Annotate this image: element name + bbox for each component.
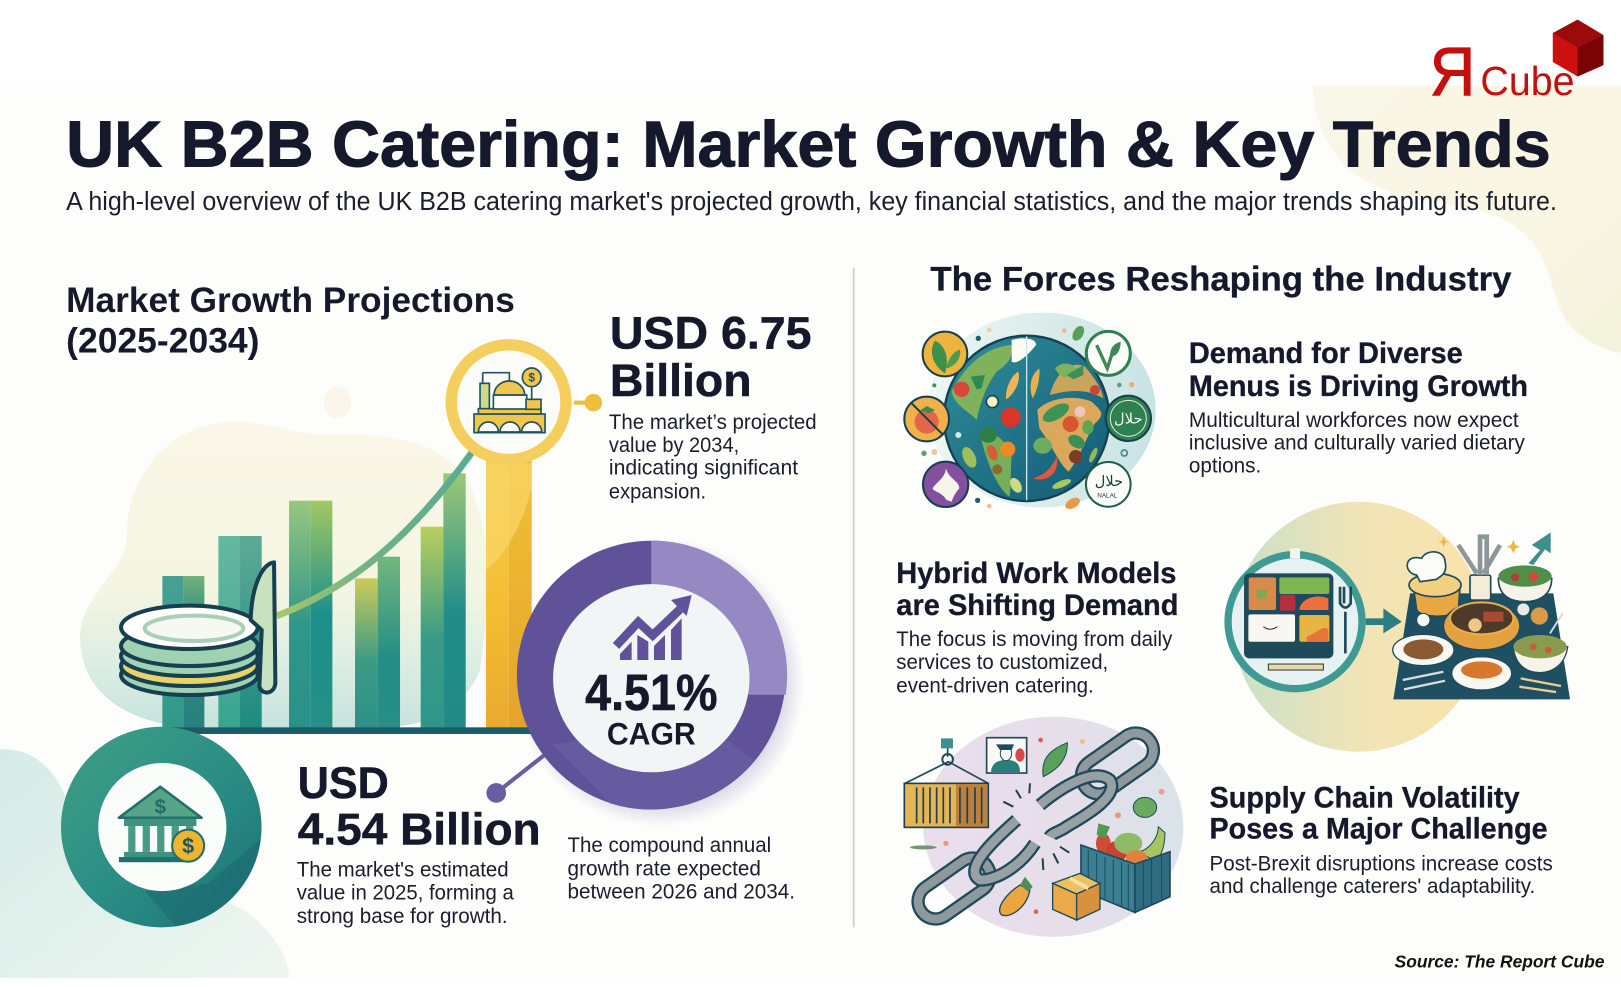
vegetable crate — [1081, 823, 1170, 912]
icon: catering building — [474, 368, 545, 433]
icon: stacked plates — [121, 606, 258, 695]
text: estimated value description: The market's estimated — [297, 857, 509, 882]
text block: diverse menus: Menus is Driving Growth — [1189, 370, 1528, 403]
text: projected value description: value by 2034, — [609, 432, 739, 457]
bar 3 — [289, 501, 332, 728]
icon: knife — [251, 562, 275, 693]
text block: supply chain: Supply Chain Volatility — [1210, 781, 1520, 814]
text: estimated value description: strong base for growth. — [297, 903, 508, 928]
text: projected value description — [609, 409, 817, 503]
icon: bank with coin — [119, 787, 204, 862]
text block: hybrid work: services to customized, — [896, 649, 1108, 674]
subtitle: A high-level overview of the UK B2B catering market's projected growth, key financial statistics, and the major trends shaping its future. — [66, 188, 1557, 216]
stat: USD 4.54 Billion: 4.54 Billion — [298, 806, 541, 855]
text block: hybrid work: Hybrid Work Models — [896, 557, 1176, 590]
badge: halal green: حلال — [1114, 411, 1143, 427]
icon: bento box to event catering — [1228, 502, 1570, 752]
bar 2 — [218, 536, 262, 728]
arrow — [1366, 608, 1402, 633]
icon: growth arrow — [616, 595, 692, 660]
stat: USD 6.75 Billion — [610, 307, 812, 406]
text: CAGR description: The compound annual — [568, 832, 771, 857]
loose leaf — [1133, 797, 1157, 817]
growth curve — [277, 453, 472, 616]
eggplant — [1000, 885, 1030, 916]
text block: supply chain: and challenge caterers' adaptability. — [1210, 873, 1535, 898]
bar 6: gold — [486, 440, 532, 728]
callout: CAGR ring: 4.51% — [585, 664, 717, 721]
icon: broken supply chain — [904, 717, 1183, 937]
text: projected value description: expansion. — [609, 478, 706, 503]
badge: leaf — [923, 332, 967, 376]
customs officer badge — [987, 738, 1027, 773]
badge: garlic — [923, 462, 968, 507]
chart baseline — [162, 727, 539, 734]
badge: halal white: حلال — [1095, 474, 1123, 490]
text: CAGR description: between 2026 and 2034. — [568, 878, 795, 903]
badge: halal white — [1086, 462, 1131, 507]
text block: diverse menus: options. — [1189, 452, 1261, 477]
callout: CAGR ring: CAGR — [607, 715, 696, 751]
icon: globe with dietary badges — [904, 313, 1156, 511]
bento ring — [1228, 548, 1362, 689]
text block: supply chain: Poses a Major Challenge — [1210, 812, 1548, 845]
callout: CAGR ring — [486, 538, 804, 827]
event table — [1393, 532, 1570, 699]
title: UK B2B Catering: Market Growth & Key Trends — [66, 107, 1551, 180]
icon: bank with coin: $ — [182, 833, 194, 858]
badge: vegan — [1086, 331, 1130, 375]
text block: supply chain: Post-Brexit disruptions increase costs — [1210, 850, 1553, 875]
text block: hybrid work: are Shifting Demand — [896, 589, 1179, 622]
breakage sparks — [1003, 783, 1069, 870]
callout: USD 4.54 Billion ring — [61, 727, 262, 927]
badge: crossed tomato — [904, 397, 949, 441]
stat: USD 6.75 Billion: USD 6.75 — [610, 307, 812, 358]
bar 4 — [355, 557, 400, 728]
stat: USD 4.54 Billion — [298, 759, 541, 855]
chart: market growth bars — [80, 387, 539, 734]
callout: USD 6.75 Billion icon — [446, 339, 602, 465]
heading: market growth projections: (2025-2034) — [66, 322, 259, 361]
chain lower — [911, 820, 1035, 926]
badge: halal green — [1106, 396, 1151, 441]
stat: USD 6.75 Billion: Billion — [610, 355, 752, 406]
text block: supply chain — [1210, 781, 1553, 898]
stat: USD 4.54 Billion: USD — [298, 759, 389, 808]
heading: market growth projections — [66, 281, 515, 361]
text block: diverse menus: Multicultural workforces now expect — [1189, 407, 1519, 432]
bar 5 — [421, 473, 466, 728]
text block: hybrid work: event-driven catering. — [896, 673, 1094, 698]
text block: diverse menus — [1189, 337, 1528, 477]
text: estimated value description: value in 2025, forming a — [297, 879, 515, 904]
text: projected value description: indicating significant — [609, 455, 798, 480]
logo: RCube: Cube — [1480, 59, 1574, 104]
text block: hybrid work: The focus is moving from daily — [896, 626, 1172, 651]
logo: RCube — [1430, 20, 1603, 110]
text block: diverse menus: inclusive and culturally varied dietary — [1189, 430, 1525, 455]
divider — [853, 268, 855, 927]
icon: bank with coin: $ — [154, 796, 166, 819]
text block: diverse menus: Demand for Diverse — [1189, 337, 1463, 370]
text: projected value description: The market’s projected — [609, 409, 817, 434]
hanging container — [904, 738, 988, 827]
leaf — [1043, 743, 1067, 777]
text: CAGR description — [568, 832, 795, 903]
heading: market growth projections: Market Growth Projections — [66, 281, 515, 320]
chain upper — [1040, 726, 1160, 837]
text: CAGR description: growth rate expected — [568, 856, 761, 881]
source note: Source: The Report Cube — [1395, 952, 1605, 972]
badge: halal white: NALAL — [1097, 493, 1118, 500]
icon: catering building: $ — [528, 371, 535, 385]
text block: hybrid work — [896, 557, 1179, 698]
heading: forces reshaping the industry: The Forces Reshaping the Industry — [930, 261, 1511, 299]
cardboard box — [1053, 873, 1100, 920]
logo: RCube: Я — [1430, 34, 1475, 110]
bar 1 — [162, 576, 204, 728]
text: estimated value description — [297, 857, 515, 928]
